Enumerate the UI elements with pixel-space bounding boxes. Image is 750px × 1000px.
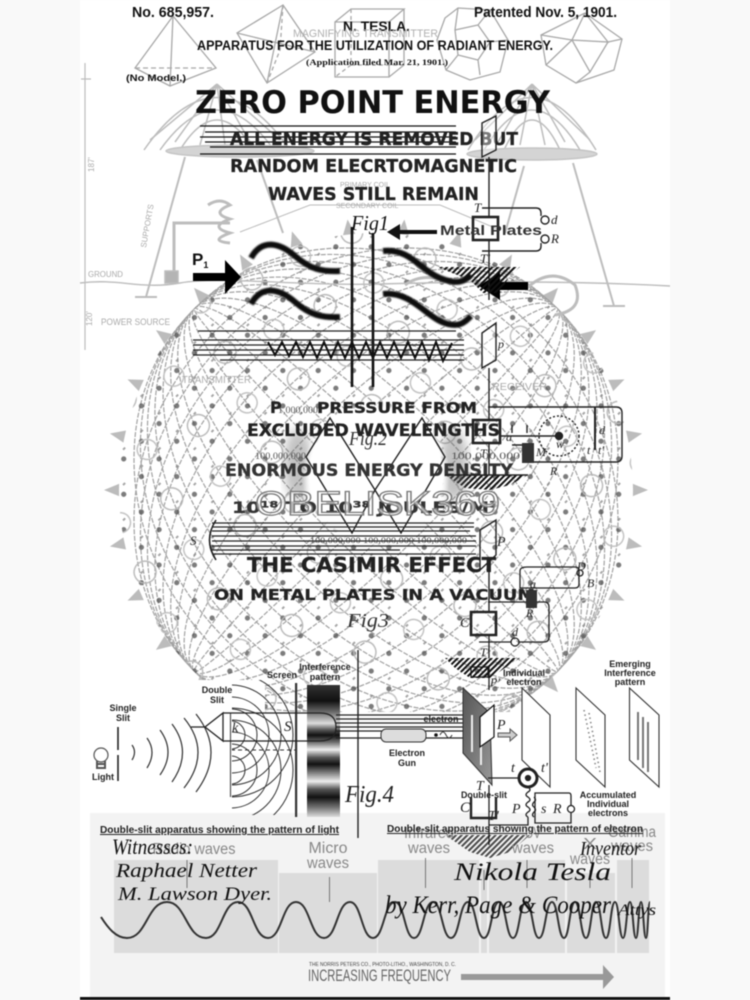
interference band bbox=[307, 685, 340, 817]
circuit letters: d bbox=[551, 212, 558, 227]
title: ZERO POINT ENERGY bbox=[195, 85, 551, 121]
tower labels bbox=[85, 157, 547, 393]
Tesla circuit 2 parts: t bbox=[587, 443, 591, 457]
tower labels: SUPPORTS bbox=[139, 204, 156, 248]
platonic solids bbox=[135, 5, 622, 86]
ground hatch 3 bbox=[445, 658, 520, 678]
witnesses: Witnesses: bbox=[112, 834, 193, 859]
wave fronts from single slit bbox=[132, 714, 211, 792]
Tesla circuit 2 parts: t' bbox=[598, 443, 604, 457]
subtitle bbox=[230, 129, 519, 205]
Fig.4 circuit bbox=[471, 769, 574, 845]
captions: Double-slit apparatus showing the pattern of electron bbox=[387, 824, 643, 835]
detection screens: pattern bbox=[615, 677, 645, 687]
arrow: increasing frequency bbox=[461, 965, 614, 989]
application date: (Application filed Mar. 21, 1901.) bbox=[306, 57, 448, 67]
slit labels: Slit bbox=[210, 695, 224, 705]
subtitle: ALL ENERGY IS REMOVED BUT bbox=[230, 129, 519, 150]
slit labels: Slit bbox=[116, 713, 130, 723]
electron gun: electron bbox=[423, 714, 459, 724]
numbers row: 100,000,000 100,000,000 100,000,000 bbox=[310, 535, 467, 545]
attorneys signature: Attys bbox=[617, 902, 656, 919]
Fig.4 label: Fig.4 bbox=[344, 782, 394, 808]
ground line 2 bbox=[445, 474, 528, 476]
detection screens: Emerging bbox=[609, 659, 651, 669]
detection screens: Individual bbox=[503, 668, 545, 678]
circuit letters bbox=[474, 200, 559, 266]
spectrum labels: Gamma bbox=[608, 824, 656, 841]
pressure text bbox=[247, 398, 500, 440]
spectrum bands bbox=[114, 860, 649, 953]
spectrum labels: waves bbox=[407, 840, 450, 857]
patent header bbox=[126, 4, 617, 84]
Tesla circuit 2 parts: w bbox=[556, 437, 564, 451]
patent date: Patented Nov. 5, 1901. bbox=[474, 4, 617, 21]
P label: P bbox=[496, 535, 506, 550]
witness signatures bbox=[115, 860, 272, 905]
tower labels: 187' bbox=[87, 157, 96, 172]
Fig.2 plate lines bbox=[212, 523, 476, 554]
inventor name: N. TESLA. bbox=[343, 19, 410, 34]
Tesla circuit 2 parts: C bbox=[476, 425, 485, 439]
slit labels: Double bbox=[202, 685, 232, 695]
wattage numbers: 100,000,000 bbox=[451, 451, 521, 461]
S label: S bbox=[190, 533, 197, 548]
attorneys signature: by Kerr, Page & Cooper bbox=[385, 892, 611, 919]
witness signatures: M. Lawson Dyer. bbox=[117, 884, 272, 905]
watermark: OBELISK369 bbox=[255, 485, 500, 523]
icon: light bulb bbox=[94, 748, 108, 768]
spectrum labels: UV bbox=[525, 825, 541, 842]
Fig.4 letters: t' bbox=[541, 761, 549, 776]
frequency wave bbox=[101, 902, 650, 938]
arrow: P1 pressure right bbox=[193, 260, 241, 294]
Tesla circuit 2 parts bbox=[476, 337, 606, 478]
slit labels: pattern bbox=[310, 672, 340, 682]
spectrum labels: Micro bbox=[308, 840, 348, 857]
lithographer credit: THE NORRIS PETERS CO., PHOTO-LITHO., WASHINGTON, D. C. bbox=[309, 962, 456, 968]
spectrum labels: X bbox=[583, 836, 598, 853]
transmitter caption: MAGNIFYING TRANSMITTER bbox=[293, 28, 438, 40]
wattage numbers bbox=[255, 405, 521, 461]
slit labels bbox=[92, 662, 351, 782]
Fig.4 letters: R bbox=[552, 802, 562, 817]
Tesla circuit 3 parts: P' bbox=[489, 675, 500, 689]
panel: spectrum background bbox=[90, 813, 665, 997]
Fig.2 label: Fig.2 bbox=[348, 428, 387, 450]
patent title: APPARATUS FOR THE UTILIZATION OF RADIANT ENERGY. bbox=[197, 38, 553, 53]
Fig.4 letters: T' bbox=[488, 809, 500, 824]
Tesla circuit 3 parts: R bbox=[525, 606, 534, 620]
Fig.4 letters: T bbox=[476, 779, 485, 794]
interference arcs bbox=[231, 679, 296, 816]
tube letters: k bbox=[232, 721, 239, 736]
P1 label: 1 bbox=[203, 260, 208, 270]
witness signatures: Raphael Netter bbox=[115, 860, 257, 882]
halo and glow around hexagon bbox=[284, 401, 468, 549]
energy density text: 10¹⁸ TO 10³⁸ JOULES/M³ bbox=[232, 498, 498, 517]
page background bbox=[80, 0, 670, 1000]
Fig.1 label: Fig1 bbox=[350, 211, 389, 235]
icon: tetrahedron bbox=[135, 16, 216, 86]
Casimir heading: THE CASIMIR EFFECT bbox=[247, 553, 496, 577]
Fig.1 lower lines bbox=[193, 331, 464, 360]
pressure text: PRESSURE FROM bbox=[317, 399, 477, 417]
detection screens: Individual bbox=[587, 799, 629, 809]
detection screens: electron bbox=[506, 677, 542, 687]
Tesla circuit 3 parts: T' bbox=[480, 645, 490, 659]
Fig.4 letters: s bbox=[541, 802, 547, 817]
Tesla circuit 2 bbox=[473, 323, 622, 475]
tower labels: POWER SOURCE bbox=[101, 317, 170, 327]
Tesla circuit 3 bbox=[471, 567, 583, 690]
pressure text: EXCLUDED WAVELENGTHS bbox=[247, 421, 500, 440]
Fig.4 letters: t bbox=[511, 761, 516, 776]
Fig.2 antenna plate bbox=[480, 520, 496, 612]
slit labels: Screen bbox=[267, 670, 297, 680]
Tesla circuit 1 bbox=[473, 116, 549, 300]
icon: cube bbox=[335, 9, 404, 77]
electron gun: Gun bbox=[398, 758, 416, 768]
detection screens: Interference bbox=[604, 668, 656, 678]
Casimir subheading: ON METAL PLATES IN A VACUUM bbox=[214, 586, 535, 604]
captions: Double-slit apparatus showing the pattern of light bbox=[100, 825, 340, 836]
Tesla circuit 3 parts: D bbox=[576, 559, 586, 573]
tower labels: TRANSMITTER bbox=[182, 375, 251, 386]
double slit plate bbox=[463, 688, 517, 785]
spectrum labels: waves bbox=[306, 855, 349, 872]
spark-gap bracket bbox=[210, 520, 216, 560]
inventor label: Inventor bbox=[579, 838, 641, 860]
ground hatch 2 bbox=[445, 475, 528, 490]
spectrum ticks bbox=[187, 858, 632, 902]
increasing frequency label: INCREASING FREQUENCY bbox=[308, 966, 451, 985]
patent number: No. 685,957. bbox=[132, 4, 214, 21]
slit labels: Interference bbox=[299, 662, 351, 672]
spectrum labels: waves bbox=[610, 838, 653, 855]
tower labels: SECONDARY COIL bbox=[336, 203, 398, 210]
double slit barrier bbox=[230, 713, 232, 797]
spectrum labels: Infrared bbox=[404, 825, 454, 842]
electron gun bbox=[381, 714, 459, 768]
double slit plate: P bbox=[496, 718, 506, 733]
tower: magnifying transmitter bbox=[80, 63, 670, 350]
slit labels: Light bbox=[92, 772, 114, 782]
wattage numbers: 100,000,000 bbox=[255, 451, 307, 461]
tower labels: RECEIVER bbox=[492, 382, 547, 393]
no model note: (No Model.) bbox=[126, 73, 186, 84]
Tesla circuit 2 parts: a bbox=[506, 430, 512, 444]
Tesla circuit 3 parts: a bbox=[530, 577, 536, 591]
electron gun: Electron bbox=[389, 748, 425, 758]
circuit letters: T' bbox=[480, 251, 490, 266]
Fig.4 letters: C bbox=[460, 800, 471, 816]
tube letters: S bbox=[284, 719, 292, 735]
spectrum labels: waves bbox=[569, 851, 610, 868]
slit labels: Single bbox=[109, 703, 137, 713]
panel: double-slit light diagram bbox=[92, 662, 351, 832]
detection screens: Accumulated bbox=[580, 790, 636, 800]
Tesla circuit 2 parts: M bbox=[535, 445, 547, 459]
energy density text bbox=[225, 461, 514, 517]
white area behind lower diagrams bbox=[80, 680, 670, 813]
tower labels: 120' bbox=[85, 311, 94, 326]
circuit letters: T bbox=[474, 200, 482, 215]
subtitle: WAVES STILL REMAIN bbox=[268, 184, 479, 205]
wattage numbers: 1,000,000 bbox=[278, 405, 319, 415]
Casimir plates bbox=[352, 227, 373, 387]
double-slit label: Double-slit bbox=[461, 790, 507, 800]
Fig.3 label: Fig3 bbox=[346, 610, 389, 632]
arrow: P1 pressure left bbox=[479, 272, 528, 300]
single slit barrier bbox=[117, 727, 119, 781]
Tesla circuit 2 parts: R bbox=[549, 464, 558, 478]
label: metal plates: Metal Plates bbox=[440, 223, 542, 238]
ground hatch 1 bbox=[437, 267, 520, 293]
detection screens bbox=[503, 659, 659, 818]
Tesla circuit 2 parts: T' bbox=[480, 446, 490, 460]
detection screens: electrons bbox=[588, 808, 628, 818]
spectrum labels: Radio waves bbox=[152, 841, 236, 858]
energy density text: ENORMOUS ENERGY DENSITY bbox=[225, 461, 514, 480]
Tesla circuit 3 parts: B bbox=[587, 576, 595, 590]
Fig.4 vertical line bbox=[357, 650, 359, 838]
Fig.1 plate lines bbox=[200, 126, 456, 154]
icon: icosahedron bbox=[541, 13, 622, 83]
electron tube bbox=[191, 713, 475, 741]
pressure text: P bbox=[270, 398, 282, 417]
Fig.4 letters bbox=[460, 761, 562, 824]
inventor signature: Nikola Tesla bbox=[453, 859, 611, 886]
tower labels: GROUND bbox=[88, 270, 123, 279]
spectrum labels: waves bbox=[511, 840, 554, 857]
ground hatch in spectrum bbox=[445, 835, 530, 858]
hexagon diamonds bbox=[306, 418, 445, 533]
Fig.4 letters: P bbox=[511, 802, 521, 817]
icon: dodecahedron bbox=[437, 8, 508, 80]
virtual waves bbox=[251, 245, 471, 325]
Tesla circuit 2 parts: d bbox=[599, 423, 606, 437]
Tesla circuit 3 parts: C bbox=[460, 616, 470, 631]
circuit letters: R bbox=[550, 231, 559, 246]
geodesic sphere bbox=[104, 220, 648, 940]
icon: octahedron bbox=[237, 5, 315, 83]
arrow: to plate bbox=[387, 224, 437, 240]
screen bbox=[295, 683, 297, 817]
Tesla circuit 2 parts: p bbox=[497, 337, 504, 351]
Tesla circuit 3 parts bbox=[460, 559, 595, 689]
spectrum labels bbox=[152, 824, 656, 872]
tube letters bbox=[232, 719, 292, 736]
P1 label: P bbox=[192, 250, 203, 269]
oscillating wave bbox=[268, 342, 452, 361]
bottom rule bbox=[80, 997, 670, 1000]
tower labels: PRIMARY COIL bbox=[340, 182, 390, 189]
Tesla circuit 3 parts: d bbox=[512, 625, 519, 639]
subtitle: RANDOM ELECRTOMAGNETIC bbox=[230, 156, 517, 177]
captions bbox=[100, 824, 643, 836]
